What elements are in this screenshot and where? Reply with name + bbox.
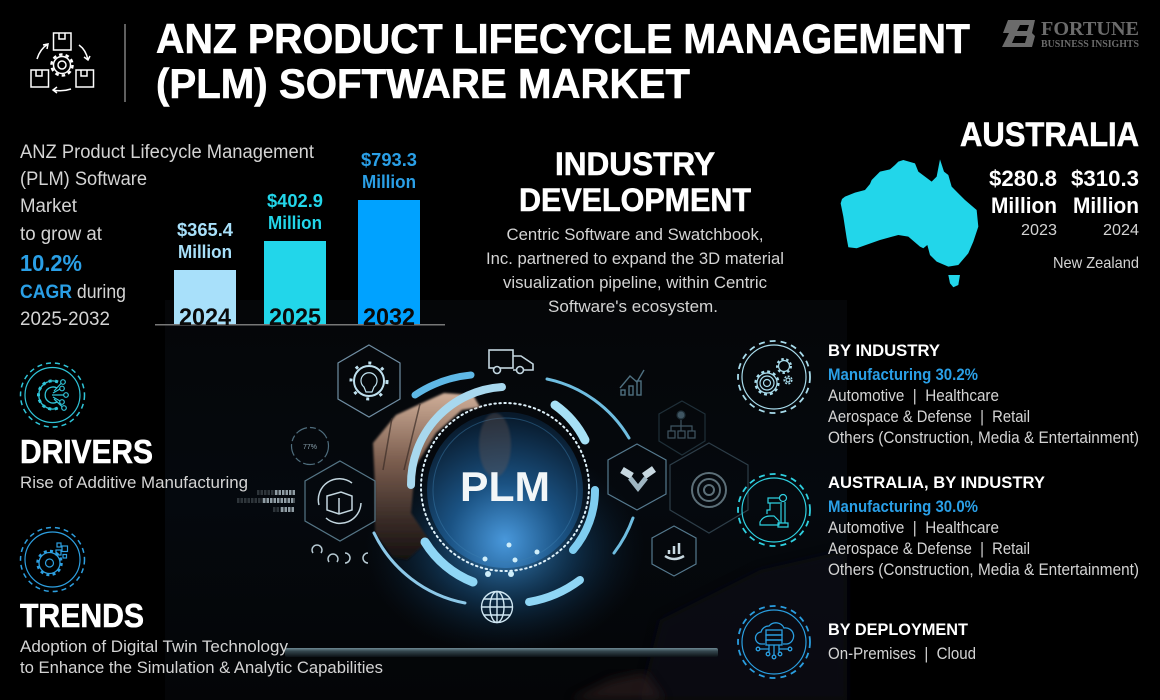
industry development text: Inc. partnered to expand the 3D material <box>486 249 784 268</box>
Australia by industry text <box>828 474 1139 579</box>
trends text: Adoption of Digital Twin Technology <box>20 637 288 656</box>
header divider <box>124 24 126 102</box>
title: (PLM) SOFTWARE MARKET <box>156 60 690 107</box>
by industry text: Aerospace & Defense | Retail <box>828 408 1030 426</box>
by deployment text <box>828 621 976 663</box>
map: Australia <box>841 159 978 287</box>
Australia figures: New Zealand <box>1053 255 1139 272</box>
percent ring gauge: 77% <box>303 444 317 451</box>
by industry text: BY INDUSTRY <box>828 342 940 360</box>
bar chart: market size: 2024 <box>179 304 232 331</box>
logo: Fortune Business Insights <box>1002 18 1139 50</box>
icon: growth chart <box>620 370 644 395</box>
Australia figures: $280.8 <box>989 166 1057 191</box>
icon: trends <box>20 528 84 592</box>
industry development text: visualization pipeline, within Centric <box>503 273 767 292</box>
industry development text: Centric Software and Swatchbook, <box>506 225 764 244</box>
title: ANZ PRODUCT LIFECYCLE MANAGEMENT <box>156 15 970 62</box>
hex icon: hand with chart <box>652 526 696 576</box>
icon: drivers <box>20 363 84 427</box>
hero image: PLM hand and hologram <box>165 300 847 700</box>
by deployment text: BY DEPLOYMENT <box>828 621 968 639</box>
market growth text: CAGR during <box>20 282 126 303</box>
market growth text: 10.2% <box>20 250 82 276</box>
bar chart: market size: $402.9 <box>267 191 323 211</box>
industry development heading: DEVELOPMENT <box>519 182 751 218</box>
industry development text: Software's ecosystem. <box>548 297 718 316</box>
market growth text: 2025-2032 <box>20 309 110 330</box>
bar chart: market size <box>155 150 445 331</box>
bar chart: market size: Million <box>268 213 322 233</box>
by industry text: Manufacturing 30.2% <box>828 366 978 384</box>
hex icon: handshake <box>608 444 666 510</box>
market growth text: Market <box>20 196 78 217</box>
hex icon: organisation <box>659 401 705 455</box>
Australia figures: 2023 <box>1021 222 1057 239</box>
PLM hologram label: PLM <box>460 463 550 510</box>
data bars <box>237 492 295 510</box>
by industry text: Automotive | Healthcare <box>828 387 999 405</box>
market growth text: ANZ Product Lifecycle Management <box>20 142 315 163</box>
bar chart: market size: Million <box>178 242 232 262</box>
Australia figures: Million <box>1073 193 1139 218</box>
industry development heading <box>519 146 751 218</box>
industry development text <box>486 225 784 316</box>
bar chart: market size: 2025 <box>269 304 321 331</box>
drivers heading: DRIVERS <box>20 433 153 470</box>
icon: by industry gears <box>738 341 810 413</box>
small round gauges <box>312 545 368 563</box>
icon: globe <box>482 592 512 622</box>
hex icon: light bulb <box>338 345 400 417</box>
logo: Fortune Business Insights: FORTUNE <box>1041 18 1139 40</box>
percent ring gauge <box>292 428 328 464</box>
title <box>156 15 970 107</box>
icon: delivery truck <box>489 350 533 374</box>
Australia by industry text: Manufacturing 30.0% <box>828 498 978 516</box>
bar chart: market size: Million <box>362 172 416 192</box>
by industry text: Others (Construction, Media & Entertainment) <box>828 429 1139 447</box>
industry development heading: INDUSTRY <box>555 146 715 182</box>
hex icon: target <box>670 443 748 533</box>
icon: by deployment cloud server <box>738 606 810 678</box>
market growth text <box>20 142 315 330</box>
hex icon: package cycle <box>305 461 375 541</box>
header icon: product lifecycle <box>31 33 94 93</box>
drivers text: Rise of Additive Manufacturing <box>20 473 248 492</box>
logo: Fortune Business Insights: BUSINESS INSIGHTS <box>1041 39 1139 50</box>
Australia figures: AUSTRALIA <box>960 116 1139 154</box>
trends text <box>20 637 383 677</box>
tablet edge <box>285 648 718 657</box>
icon: Australia by industry robot arm <box>738 474 810 546</box>
by deployment text: On-Premises | Cloud <box>828 645 976 663</box>
bar chart: market size: 2032 <box>363 304 415 331</box>
bar chart: market size: $793.3 <box>361 150 417 170</box>
Australia figures <box>960 116 1139 272</box>
Australia by industry text: Automotive | Healthcare <box>828 519 999 537</box>
trends heading: TRENDS <box>20 597 144 634</box>
Australia by industry text: Others (Construction, Media & Entertainment) <box>828 561 1139 579</box>
Australia figures: 2024 <box>1103 222 1139 239</box>
by industry text <box>828 342 1139 447</box>
market growth text: to grow at <box>20 224 103 245</box>
bar chart: market size: $365.4 <box>177 220 233 240</box>
Australia by industry text: AUSTRALIA, BY INDUSTRY <box>828 474 1045 492</box>
Australia by industry text: Aerospace & Defense | Retail <box>828 540 1030 558</box>
Australia figures: Million <box>991 193 1057 218</box>
trends text: to Enhance the Simulation & Analytic Capabilities <box>20 658 383 677</box>
market growth text: (PLM) Software <box>20 169 147 190</box>
Australia figures: $310.3 <box>1071 166 1139 191</box>
